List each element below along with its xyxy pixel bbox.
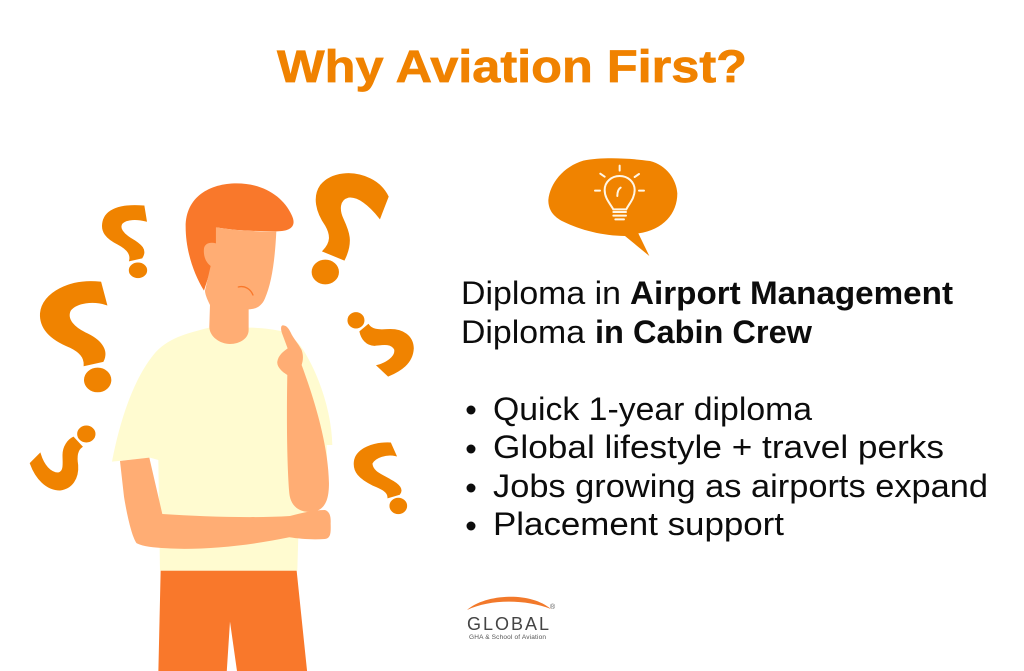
title: Why Aviation First? xyxy=(277,41,747,92)
bullet: placement support: Placement support xyxy=(493,506,784,542)
man: raised forearm and hand xyxy=(277,325,329,512)
speech bubble xyxy=(548,158,677,256)
logo: Global GHA and School of Aviation xyxy=(467,597,556,641)
logo wordmark: GLOBAL xyxy=(467,614,549,634)
bullet: jobs growing: Jobs growing as airports expand xyxy=(493,468,988,504)
question mark: lower left xyxy=(31,426,95,490)
question mark: left large xyxy=(41,282,110,391)
illustration: thinking man with question marks xyxy=(31,174,413,671)
line: airport management: Diploma in xyxy=(461,275,621,311)
man: folded arm xyxy=(120,458,331,549)
man: t-shirt xyxy=(112,328,332,571)
logo registered mark: ® xyxy=(550,603,556,611)
question mark: top left xyxy=(103,206,146,277)
question mark: right lower xyxy=(355,443,406,513)
bullet list: benefits xyxy=(466,391,988,542)
line: cabin crew: in Cabin Crew xyxy=(595,314,812,350)
man: hair xyxy=(186,183,294,291)
line: cabin crew xyxy=(461,314,812,350)
bullet: global lifestyle: Global lifestyle + travel perks xyxy=(493,429,944,465)
bullet: quick diploma: Quick 1-year diploma xyxy=(493,391,812,427)
line: airport management: Airport Management xyxy=(630,275,953,311)
man: head and neck xyxy=(204,227,276,344)
question mark: top right large xyxy=(313,174,388,283)
man: trousers xyxy=(158,571,307,671)
light bulb xyxy=(595,166,644,219)
line: cabin crew: Diploma xyxy=(461,314,585,350)
logo tagline: GHA & School of Aviation xyxy=(469,634,546,641)
man: frown xyxy=(238,287,253,295)
logo arc xyxy=(467,597,551,610)
question mark: right middle xyxy=(348,313,413,376)
icon: speech bubble with light bulb xyxy=(548,158,677,256)
heading: diploma programmes xyxy=(461,275,953,350)
line: airport management xyxy=(461,275,953,311)
